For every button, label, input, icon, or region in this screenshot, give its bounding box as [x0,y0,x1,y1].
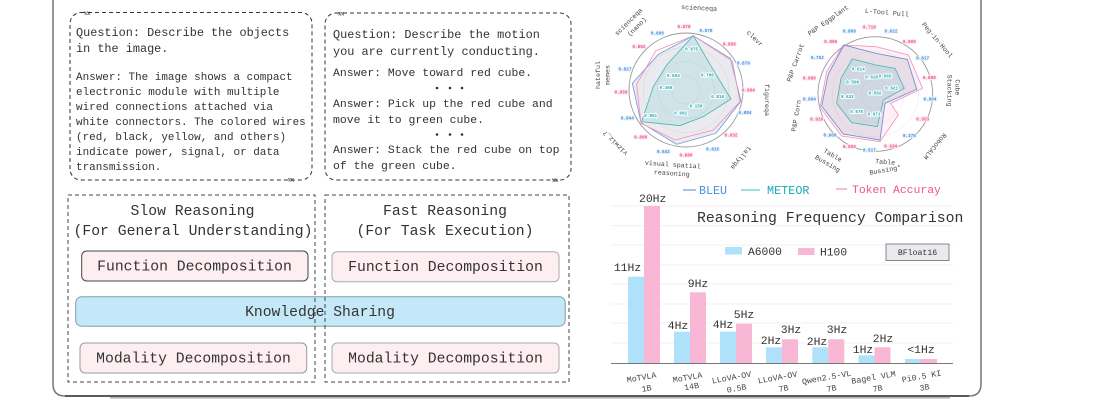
radar chart: robot tasks: RoboCALM [922,131,948,161]
radar chart: robot tasks: 0.599 [846,81,860,86]
panel: motion question and answer: move it to green cube. [333,114,484,127]
x axis labels: 1B [641,384,652,395]
radar chart: datasets: 0.460 [659,86,673,91]
radar chart: datasets: 0.827 [618,68,632,73]
radar chart: robot tasks: L-Tool Pull [865,7,909,19]
chart title: Reasoning Frequency Comparison [697,211,963,227]
radar chart: robot tasks [785,3,962,177]
radar chart: robot tasks: Stacking [945,75,953,107]
x axis labels: 7B [778,384,789,395]
panel: image question and answer: indicate power, signal, or data [76,147,280,159]
panel: motion question and answer: of the green cube. [333,160,457,173]
bar value labels: 2Hz [873,334,893,346]
x axis labels: 3B [919,383,930,394]
x axis labels: 7B [826,384,837,395]
chart legend: H100 [820,248,847,260]
panel: motion question and answer: %% [552,178,558,184]
panel: image question and answer: electronic module with multiple [76,87,279,99]
panel: image question and answer: (red, black, yellow, and others) [76,132,286,144]
radar chart: robot tasks: 0.910 [810,118,824,123]
knowledge sharing bar [76,297,565,326]
radar chart: robot tasks: 0.517 [863,148,876,153]
radar chart: datasets: tallyqa [729,145,753,171]
panel: motion question and answer: %% [338,12,344,18]
panel: image question and answer: Question: Describe the objects [76,26,289,40]
radar legend: Token Accuray [852,185,941,197]
radar chart: datasets: (nano) [626,16,648,38]
radar chart: datasets: 0.800 [651,32,664,37]
x axis labels [626,369,942,396]
radar chart: datasets: 0.810 [711,95,725,100]
radar chart: datasets: 0.842 [657,150,670,155]
radar chart: datasets: scienceqa [613,6,644,37]
panel: motion question and answer: Answer: Move toward red cube. [333,67,532,80]
panel: fast reasoning: Modality Decomposition [348,352,543,368]
radar chart: robot tasks: Peg-in-Hool [920,21,954,59]
panel: image question and answer [70,11,312,184]
radar chart: datasets: hateful [594,61,602,89]
radar chart: robot tasks: 0.809 [903,40,916,45]
panel: slow reasoning: (For General Understanding) [74,224,312,240]
panel: motion question and answer: Answer: Stack the red cube on top [333,144,560,157]
panel: slow reasoning: Slow Reasoning [131,204,254,220]
chart legend [725,247,847,260]
panel: fast reasoning: Function Decomposition [348,260,543,276]
radar chart: datasets: 0.602 [674,112,688,117]
chart legend: A6000 [748,247,782,259]
badge: BFloat16: BFloat16 [898,248,937,258]
panel: slow reasoning: Function Decomposition [97,260,292,276]
radar chart: datasets: 0.554 [667,74,680,79]
x axis labels: Qwen2.5-VL [801,370,852,387]
knowledge sharing bar: Knowledge Sharing [245,305,395,321]
bar value labels: <1Hz [907,345,935,357]
bar value labels: 3Hz [781,325,801,337]
radar chart: datasets: 0.884 [738,111,752,116]
radar chart: robot tasks: P&P Corn [790,99,803,132]
panel: image question and answer: transmission. [76,162,161,174]
panel: image question and answer: Answer: The image shows a compact [76,72,293,84]
radar chart: robot tasks: 0.804 [923,98,937,103]
radar chart: datasets: 0.862 [632,45,646,50]
bar value labels [614,194,935,357]
radar chart: datasets: 0.886 [679,153,693,158]
radar chart: robot tasks: 0.614 [852,68,865,73]
panel: motion question and answer: you are currently conducting. [333,45,540,59]
radar chart: datasets: scienceqa [681,3,717,13]
x axis labels: LLoVA-OV [711,371,752,386]
radar chart: robot tasks: Bussing [814,153,842,174]
radar chart: datasets: 0.894 [742,88,755,93]
radar chart: datasets: reasoning [654,168,690,179]
radar chart: datasets: vizwiz_7 [601,129,629,157]
radar chart: robot tasks: 0.898 [923,76,936,81]
radar chart: robot tasks: Cube [954,79,962,95]
radar chart: robot tasks: 0.632 [841,95,854,100]
bar value labels: 9Hz [688,279,708,291]
radar chart: datasets: 0.832 [724,133,738,138]
panel: fast reasoning: (For Task Execution) [356,224,534,240]
radar chart: robot tasks: 0.718 [863,26,876,31]
radar chart: datasets: 0.844 [621,117,634,122]
bar value labels: 5Hz [734,310,754,322]
radar chart: robot tasks: 0.621 [885,87,899,92]
x axis labels: Pi0.5 KI [901,369,942,385]
radar chart: robot tasks: Table [875,157,895,167]
bar value labels: 3Hz [827,325,847,337]
radar chart: robot tasks: 0.884 [803,97,816,102]
radar chart: robot tasks: P&P Carrot [785,43,806,83]
bar value labels: 4Hz [668,321,688,333]
radar legend: METEOR [767,184,809,198]
radar chart: robot tasks: 0.890 [824,40,838,45]
radar chart: datasets: visual spatial [645,159,701,171]
radar chart: robot tasks: 0.817 [916,57,930,62]
radar chart: robot tasks: P&P Eggplant [806,3,850,37]
bars: A6000 [628,277,921,363]
radar chart: datasets: memes [603,65,611,85]
radar chart: datasets: 0.816 [706,148,720,153]
x axis labels: Bagel VLM [851,369,897,387]
radar chart: datasets: 0.856 [723,43,736,48]
bar chart: reasoning frequency [611,194,963,396]
panel: image question and answer: white connectors. The colored wires [76,117,306,129]
bars: H100 [644,206,937,363]
radar chart: robot tasks: Table [822,147,843,164]
radar chart: robot tasks: 0.628 [865,76,879,81]
x axis labels: 0.5B [726,383,747,396]
radar chart: robot tasks: 0.622 [884,29,898,34]
panel: slow reasoning: Modality Decomposition [96,352,291,368]
radar chart: robot tasks: 0.671 [867,112,881,117]
panel: motion question and answer: Question: Describe the motion [333,28,540,42]
radar chart: datasets: 0.851 [644,114,658,119]
radar chart: robot tasks: 0.934 [884,144,898,149]
bar value labels: 2Hz [807,337,827,349]
radar chart: robot tasks: 0.675 [850,110,864,115]
panel: image question and answer: %% [288,178,294,184]
radar chart: datasets: 0.700 [701,73,714,78]
radar chart: datasets: 0.875 [685,47,699,52]
radar chart: robot tasks: 0.565 [878,74,892,79]
x axis labels: 7B [872,384,883,395]
radar legend: BLEU [699,184,727,198]
panel: image question and answer: wired connections attached via [76,102,273,114]
radar legend [683,184,941,198]
bar value labels: 20Hz [639,194,666,206]
radar chart: datasets: 0.856 [614,91,628,96]
panel: motion question and answer [325,12,571,184]
radar chart: datasets: 0.150 [689,104,703,109]
radar chart: robot tasks: 0.502 [868,92,882,97]
panel: slow reasoning [68,195,315,382]
radar chart: robot tasks: 0.378 [903,134,916,139]
radar chart: robot tasks: 0.909 [823,133,837,138]
panel: image question and answer: in the image. [76,42,168,56]
bar value labels: 2Hz [761,336,781,348]
panel: image question and answer: %% [84,11,90,17]
bar value labels: 11Hz [614,263,641,275]
panel: fast reasoning [325,195,569,382]
radar chart: robot tasks: 0.950 [843,145,856,150]
x axis labels: MoTVLA [672,371,703,386]
radar chart: datasets: clevr [745,29,765,48]
x axis labels: MoTVLA [626,371,657,386]
radar chart: datasets: figureqa [763,84,771,116]
radar chart: datasets: 0.898 [634,136,648,141]
radar chart: datasets: 0.878 [677,25,691,30]
radar chart: datasets: 0.878 [699,29,713,34]
bar value labels: 4Hz [713,320,733,332]
radar chart: robot tasks: 0.752 [811,56,824,61]
radar chart: robot tasks: 0.880 [803,77,816,82]
bar value labels: 1Hz [853,345,873,357]
x axis labels: 14B [684,382,700,393]
radar chart: robot tasks: 0.553 [916,118,930,123]
panel: motion question and answer: Answer: Pick up the red cube and [333,98,553,111]
radar chart: robot tasks: 0.868 [843,29,856,34]
radar chart: robot tasks: Bussing* [869,163,902,177]
badge: BFloat16 [886,244,949,260]
x axis labels: LLoVA-OV [757,371,798,386]
radar chart: datasets [594,3,771,179]
radar chart: datasets: 0.879 [737,62,750,67]
panel: fast reasoning: Fast Reasoning [383,204,507,220]
